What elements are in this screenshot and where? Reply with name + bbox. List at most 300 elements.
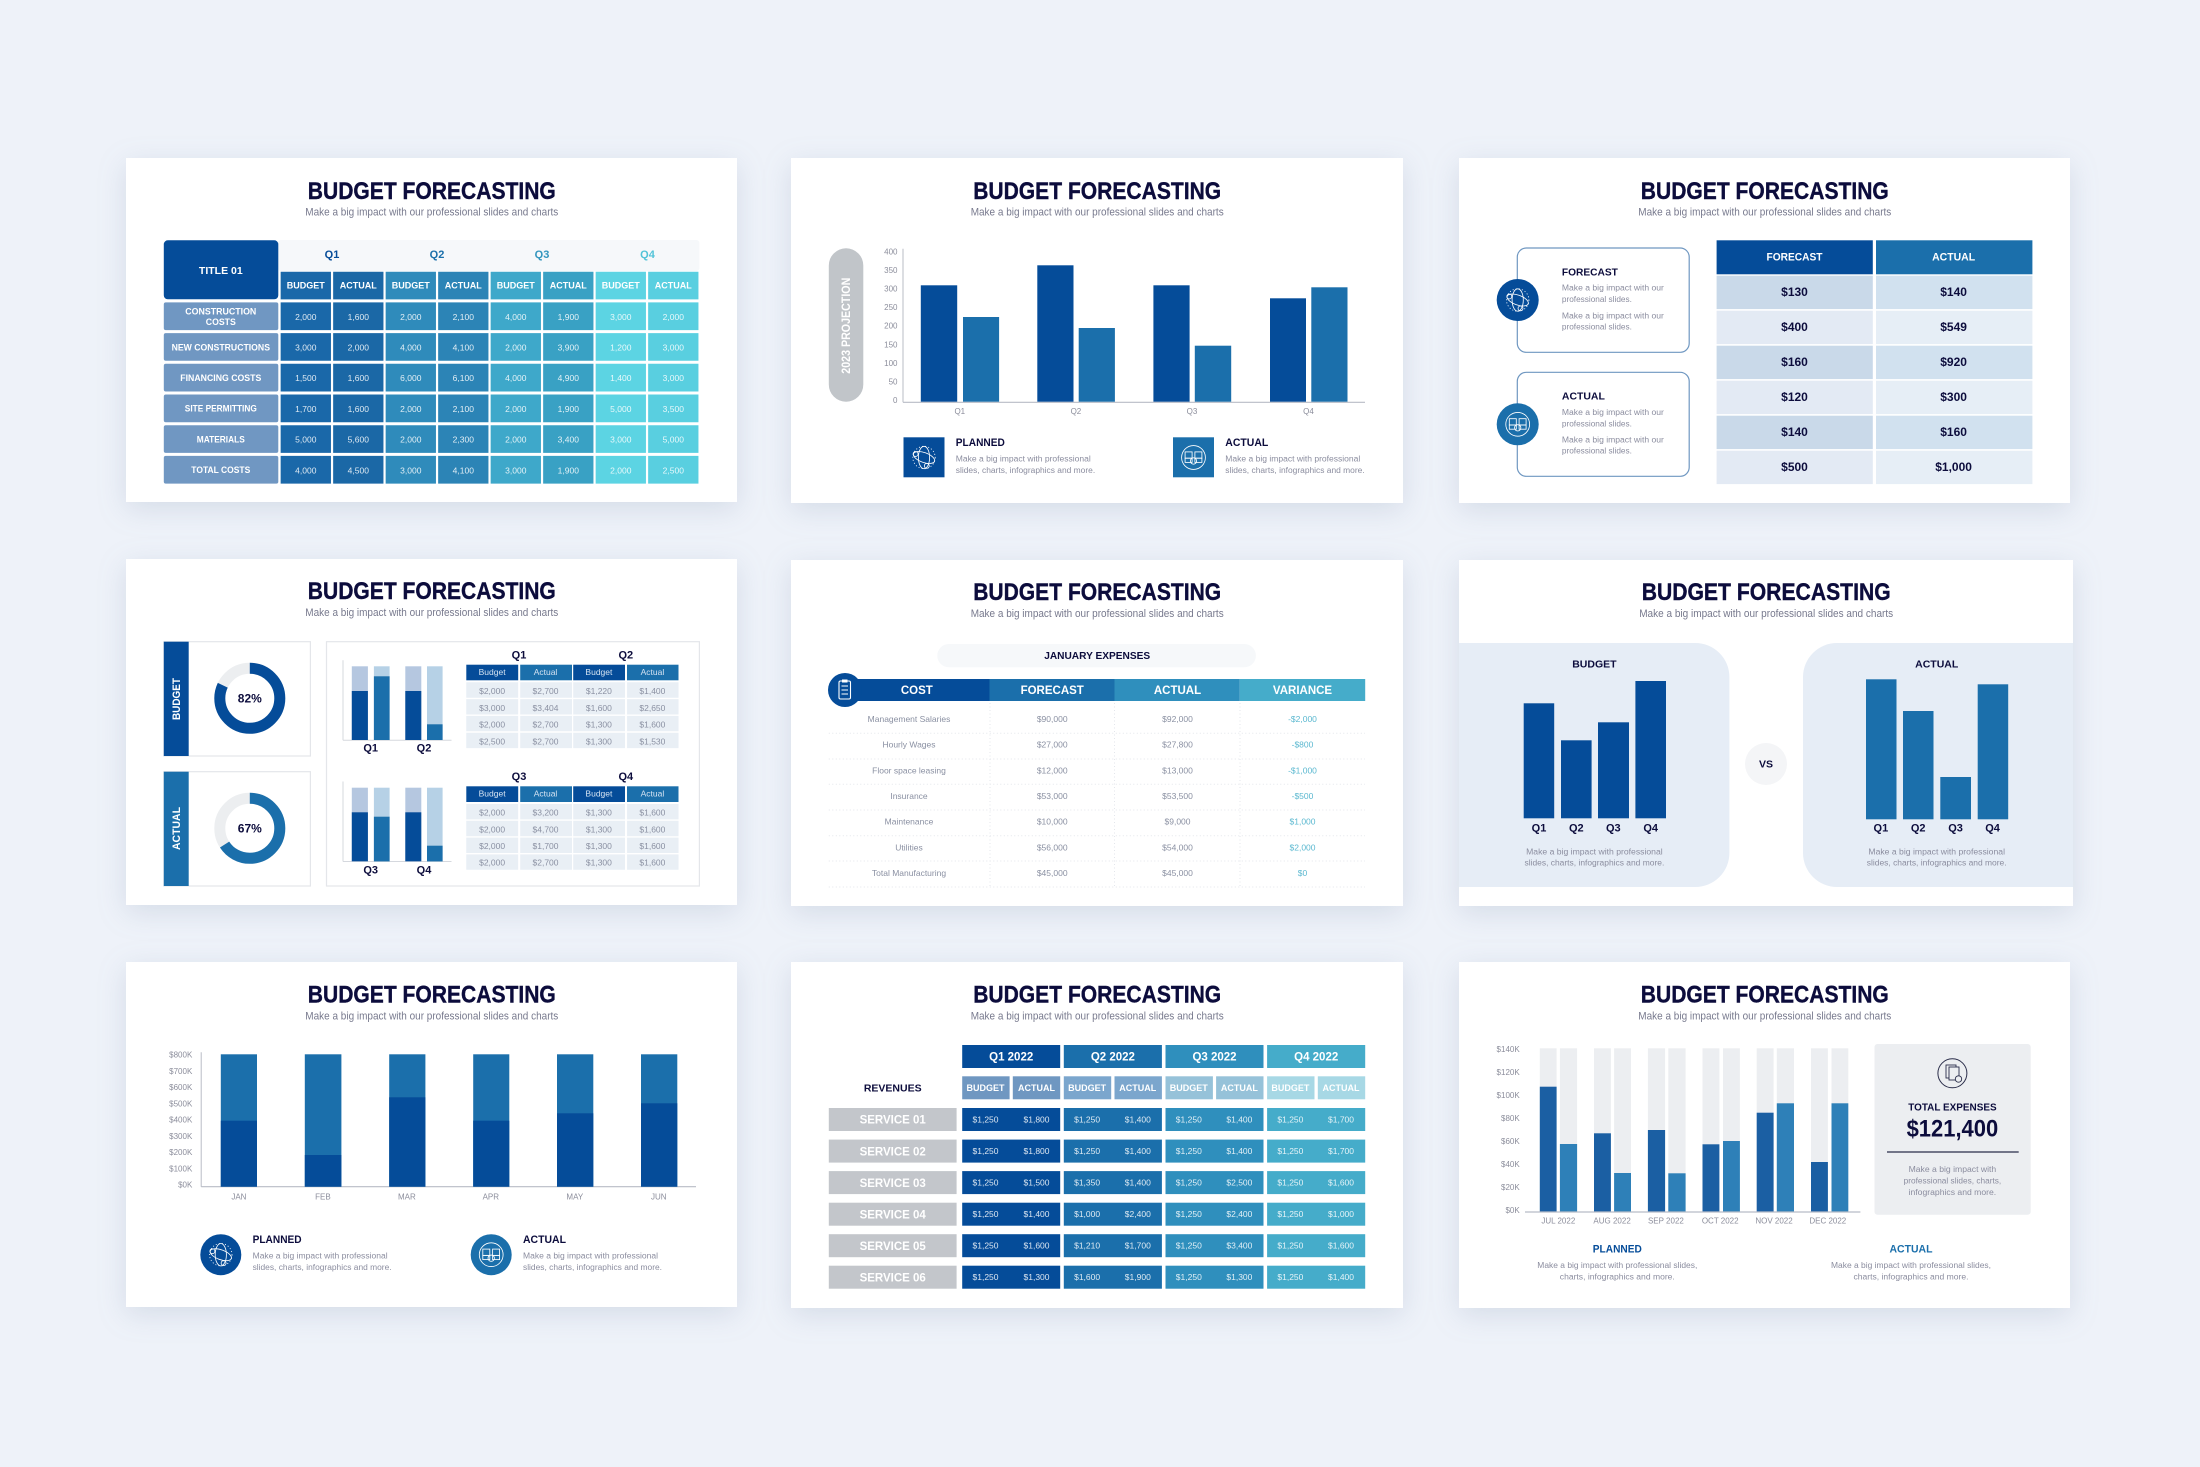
comparison table: $400 — [1781, 320, 1808, 334]
table rows: Total Manufacturing — [872, 868, 946, 878]
stacked bar chart: APR — [483, 1192, 499, 1201]
stacked bars Q3 Q4 — [343, 782, 452, 876]
budget panel: Q3 — [1606, 823, 1621, 835]
budget and actual sub headers: BUDGET — [1068, 1083, 1107, 1093]
budget panel: Q4 — [1643, 823, 1659, 835]
actual panel: ACTUAL — [1915, 659, 1959, 671]
table values: 4,100 — [453, 342, 474, 352]
subtitle: Make a big impact with our professional slides and charts — [1638, 1010, 1892, 1022]
budget panel — [1459, 643, 1729, 887]
table values: $1,800 — [1024, 1146, 1050, 1156]
budget panel: Q1 — [1532, 823, 1546, 835]
column headers: BUDGET — [602, 280, 640, 290]
comparison table: $549 — [1940, 320, 1967, 334]
legend: actual: slides, charts, infographics and more. — [1225, 466, 1365, 475]
table values: 1,600 — [348, 373, 369, 383]
legend: planned: slides, charts, infographics and more. — [956, 466, 1095, 475]
legend: planned: PLANNED — [253, 1234, 302, 1246]
actual panel: Q1 — [1874, 823, 1888, 835]
table rows: Hourly Wages — [882, 740, 936, 750]
quarter headers: Q2 2022 — [1091, 1052, 1135, 1064]
service labels — [829, 1108, 957, 1289]
table values: $1,250 — [1074, 1114, 1100, 1124]
legend: planned: PLANNED — [1593, 1243, 1642, 1255]
legend: actual: Make a big impact with professional — [523, 1252, 658, 1261]
quarter header strip — [278, 240, 699, 271]
paired bar chart — [1497, 1045, 1860, 1225]
table Q3 Q4: $4,700 — [532, 824, 559, 834]
actual panel: slides, charts, infographics and more. — [1867, 859, 2007, 868]
table values: 2,500 — [663, 465, 684, 475]
legend: actual: Make a big impact with professional slides, — [1831, 1261, 1991, 1270]
table values: 6,100 — [453, 373, 474, 383]
stacked bar chart: $100K — [169, 1164, 193, 1174]
table rows: $1,000 — [1290, 817, 1316, 827]
table values: 1,500 — [295, 373, 317, 383]
table corner: title 01: TITLE 01 — [199, 265, 243, 277]
column headers: BUDGET — [392, 280, 430, 290]
title: BUDGET FORECASTING — [308, 578, 556, 605]
table values: 4,500 — [348, 465, 369, 475]
table Q3 Q4: Actual — [641, 789, 664, 799]
table values: $1,250 — [1277, 1114, 1304, 1124]
table rows: Utilities — [895, 842, 923, 852]
table Q3 Q4: $2,000 — [479, 858, 505, 868]
budget panel: slides, charts, infographics and more. — [1524, 859, 1664, 868]
legend: actual — [1831, 1243, 1991, 1281]
comparison table: ACTUAL — [1932, 252, 1975, 264]
january expenses pill: JANUARY EXPENSES — [1044, 650, 1150, 662]
table values: 1,900 — [558, 404, 579, 414]
table Q3 Q4: $1,600 — [639, 858, 666, 868]
stacked bar chart: MAR — [398, 1192, 416, 1201]
panel: slide 6 budget vs actual — [1459, 560, 2073, 906]
bar chart: Q1 — [954, 407, 966, 416]
column headers — [287, 280, 692, 290]
actual card: professional slides. — [1562, 447, 1632, 456]
legend: actual: ACTUAL — [1225, 437, 1269, 449]
table Q1 Q2: $2,000 — [479, 686, 505, 696]
table values: 3,500 — [663, 404, 684, 414]
column headers: BUDGET — [287, 280, 325, 290]
stacked bars Q3 Q4: Q4 — [417, 864, 432, 876]
stacked bar chart: JUN — [651, 1192, 667, 1201]
table values: 3,000 — [295, 342, 317, 352]
paired bar chart: $60K — [1501, 1137, 1520, 1146]
title: BUDGET FORECASTING — [973, 981, 1221, 1008]
comparison table: $120 — [1781, 390, 1808, 404]
legend: planned: PLANNED — [956, 437, 1005, 449]
column headers: ACTUAL — [655, 280, 692, 290]
table Q1 Q2: Actual — [534, 667, 557, 677]
table values — [972, 1114, 1354, 1282]
table Q3 Q4: $1,300 — [586, 841, 612, 851]
table Q3 Q4: $2,000 — [479, 807, 505, 817]
bar chart: 200 — [884, 322, 898, 331]
table values: $1,700 — [1328, 1146, 1354, 1156]
budget and actual sub headers: BUDGET — [1271, 1083, 1310, 1093]
table values: 4,000 — [295, 465, 317, 475]
revenues label: REVENUES — [864, 1083, 922, 1095]
paired bar chart: $120K — [1497, 1068, 1520, 1077]
title: BUDGET FORECASTING — [1641, 981, 1889, 1008]
actual card — [1497, 372, 1689, 476]
table values: $1,250 — [972, 1272, 999, 1282]
budget and actual sub headers: BUDGET — [1170, 1083, 1208, 1093]
panel: slide 4 donuts and quarter tables — [126, 559, 737, 905]
table rows — [868, 714, 1317, 878]
table grid lines — [829, 703, 1365, 887]
legend: actual: slides, charts, infographics and more. — [523, 1263, 662, 1272]
budget and actual sub headers: ACTUAL — [1221, 1083, 1258, 1093]
quarter header strip: Q3 — [535, 249, 549, 261]
comparison table: FORECAST — [1766, 252, 1823, 264]
row labels: MATERIALS — [197, 434, 245, 444]
budget and actual sub headers: BUDGET — [966, 1083, 1005, 1093]
table values: $1,250 — [1074, 1146, 1100, 1156]
bar chart: 400 — [884, 247, 898, 256]
legend: planned — [1537, 1243, 1697, 1281]
table values: $1,000 — [1328, 1209, 1354, 1219]
actual donut panel: ACTUAL — [171, 807, 183, 850]
table values: $1,600 — [1328, 1241, 1354, 1251]
table values: $1,600 — [1024, 1241, 1050, 1251]
table rows: $53,500 — [1162, 791, 1193, 801]
table header — [850, 679, 1365, 701]
title: BUDGET FORECASTING — [308, 981, 556, 1008]
comparison table — [1717, 240, 2032, 484]
budget panel: Q2 — [1569, 823, 1584, 835]
stacked bar chart: $0K — [178, 1181, 193, 1190]
paired bar chart: DEC 2022 — [1809, 1216, 1847, 1225]
vs badge — [1745, 743, 1787, 785]
table values: 3,000 — [663, 342, 684, 352]
table values: $1,250 — [1176, 1146, 1202, 1156]
stacked bar chart: FEB — [315, 1192, 331, 1201]
column headers: ACTUAL — [340, 280, 377, 290]
paired bar chart: SEP 2022 — [1648, 1216, 1684, 1225]
subtitle: Make a big impact with our professional slides and charts — [305, 607, 559, 619]
forecast card: Make a big impact with our — [1562, 311, 1664, 320]
table rows: $92,000 — [1162, 714, 1193, 724]
table rows: $27,800 — [1162, 740, 1193, 750]
actual panel: Make a big impact with professional — [1868, 847, 2005, 856]
table values: $1,210 — [1074, 1241, 1100, 1251]
table values: $1,250 — [972, 1114, 999, 1124]
table rows: -$2,000 — [1288, 714, 1317, 724]
table rows: $56,000 — [1037, 842, 1068, 852]
table Q3 Q4: $1,700 — [532, 841, 559, 851]
service labels: SERVICE 06 — [860, 1272, 926, 1284]
table values: 3,000 — [610, 435, 632, 445]
table values: 3,000 — [505, 465, 527, 475]
table Q3 Q4: $1,300 — [586, 858, 612, 868]
bar chart: Q3 — [1187, 407, 1198, 416]
table Q3 Q4: Budget — [585, 789, 613, 799]
table values: $2,400 — [1226, 1209, 1253, 1219]
subtitle: Make a big impact with our professional slides and charts — [1638, 206, 1892, 218]
table values: $1,800 — [1024, 1114, 1050, 1124]
stacked bar chart: $300K — [169, 1132, 193, 1141]
legend: planned: Make a big impact with professional — [253, 1252, 388, 1261]
table values: 2,000 — [610, 465, 632, 475]
row labels: NEW CONSTRUCTIONS — [172, 342, 270, 352]
table values: 3,000 — [663, 373, 684, 383]
title: BUDGET FORECASTING — [1641, 178, 1889, 205]
quarter header strip: Q4 — [640, 249, 656, 261]
quarter headers — [962, 1045, 1365, 1068]
table rows: $10,000 — [1037, 817, 1068, 827]
table Q3 Q4: $1,300 — [586, 824, 612, 834]
table columns — [306, 272, 673, 484]
comparison table: $160 — [1940, 425, 1967, 439]
bar chart: 0 — [893, 396, 898, 405]
table Q1 Q2: Q2 — [618, 650, 633, 662]
comparison table: $1,000 — [1935, 460, 1972, 474]
table values: 2,000 — [400, 435, 422, 445]
table Q1 Q2: $1,300 — [586, 720, 612, 730]
paired bar chart: AUG 2022 — [1593, 1216, 1631, 1225]
table values: $1,400 — [1024, 1209, 1050, 1219]
vs badge: VS — [1759, 758, 1773, 770]
actual donut panel — [164, 772, 310, 886]
table Q1 Q2: $2,700 — [532, 736, 559, 746]
table values: 3,000 — [610, 312, 632, 322]
budget and actual sub headers — [962, 1076, 1365, 1099]
bar chart — [884, 247, 1365, 416]
subtitle: Make a big impact with our professional slides and charts — [971, 608, 1224, 620]
title: BUDGET FORECASTING — [973, 178, 1221, 205]
stacked bar chart: $700K — [169, 1067, 193, 1076]
icon: clipboard — [828, 673, 862, 707]
table Q1 Q2: $2,650 — [639, 703, 666, 713]
table Q1 Q2: $3,404 — [532, 703, 559, 713]
table values: $1,400 — [1125, 1178, 1151, 1188]
quarter headers: Q4 2022 — [1294, 1052, 1338, 1064]
panel: slide 8 revenues table — [791, 962, 1403, 1308]
row labels: CONSTRUCTION — [185, 306, 256, 316]
stacked bar chart: $600K — [169, 1083, 193, 1092]
actual card: Make a big impact with our — [1562, 435, 1664, 444]
title: BUDGET FORECASTING — [1642, 579, 1891, 606]
legend: actual — [1173, 437, 1365, 477]
table values: $1,000 — [1074, 1209, 1100, 1219]
comparison table: $500 — [1781, 460, 1808, 474]
table Q1 Q2: $1,220 — [586, 686, 612, 696]
forecast card: professional slides. — [1562, 323, 1632, 332]
forecast card: Make a big impact with our — [1562, 284, 1664, 293]
table rows: -$500 — [1292, 791, 1314, 801]
table rows: Insurance — [890, 791, 928, 801]
service labels: SERVICE 01 — [860, 1115, 926, 1127]
table Q3 Q4: Q4 — [618, 771, 634, 783]
legend: planned — [904, 437, 1095, 477]
table values: $1,250 — [1176, 1209, 1202, 1219]
table values: $2,500 — [1226, 1178, 1253, 1188]
total expenses panel: TOTAL EXPENSES — [1908, 1101, 1997, 1113]
table values: 5,000 — [610, 404, 632, 414]
slide card 6 — [1459, 560, 2073, 906]
paired bar chart: $20K — [1501, 1183, 1520, 1192]
table values: 2,000 — [295, 312, 317, 322]
legend: planned: Make a big impact with professional — [956, 455, 1091, 464]
slide card 8 — [791, 962, 1403, 1308]
table values: $3,400 — [1226, 1241, 1253, 1251]
actual panel: Q3 — [1948, 823, 1963, 835]
stacked bar chart — [169, 1051, 696, 1201]
paired bar chart: $100K — [1497, 1091, 1520, 1100]
stacked bar chart: $400K — [169, 1116, 193, 1125]
slide card 5 — [791, 560, 1403, 906]
stacked bars Q3 Q4: Q3 — [363, 864, 378, 876]
value bands — [962, 1108, 1365, 1289]
table Q3 Q4 — [466, 771, 678, 871]
table Q3 Q4: $2,700 — [532, 858, 559, 868]
table values: 2,000 — [663, 312, 684, 322]
table header: ACTUAL — [1154, 685, 1201, 697]
bar chart: 350 — [884, 266, 898, 275]
january expenses pill — [937, 644, 1256, 667]
legend: planned — [200, 1234, 392, 1275]
table values: $1,300 — [1226, 1272, 1253, 1282]
table values: $1,250 — [1176, 1178, 1202, 1188]
comparison table: $160 — [1781, 355, 1808, 369]
table rows: Management Salaries — [868, 714, 950, 724]
subtitle: Make a big impact with our professional slides and charts — [971, 206, 1224, 218]
table Q3 Q4: $1,600 — [639, 807, 666, 817]
stacked bar chart: $200K — [169, 1148, 193, 1157]
slide card 7 — [126, 962, 737, 1307]
table values: 2,000 — [505, 342, 527, 352]
panel: slide 7 monthly stacked bars — [126, 962, 737, 1307]
budget and actual sub headers: ACTUAL — [1119, 1083, 1157, 1093]
table Q1 Q2 — [466, 650, 678, 750]
total expenses panel: professional slides, charts, — [1904, 1177, 2001, 1186]
column headers: ACTUAL — [550, 280, 587, 290]
panel: slide 1 quarterly budget table — [126, 158, 737, 502]
table values: $1,250 — [972, 1178, 999, 1188]
table values: $1,250 — [1277, 1272, 1304, 1282]
table rows: $27,000 — [1037, 740, 1068, 750]
legend: planned: charts, infographics and more. — [1560, 1272, 1675, 1281]
table Q1 Q2: $2,700 — [532, 720, 559, 730]
total expenses panel — [1874, 1044, 2031, 1215]
bar chart: 300 — [884, 284, 898, 294]
table values: 4,000 — [505, 312, 527, 322]
budget and actual sub headers: ACTUAL — [1018, 1083, 1055, 1093]
table Q1 Q2: $2,700 — [532, 686, 559, 696]
stacked bar chart: $500K — [169, 1100, 193, 1108]
bar chart: 100 — [884, 359, 898, 368]
budget panel: BUDGET — [1572, 659, 1617, 671]
projection pill — [829, 248, 863, 402]
table header: COST — [901, 685, 933, 697]
table values: 4,000 — [505, 373, 527, 383]
table values: $1,600 — [1074, 1272, 1100, 1282]
column headers: ACTUAL — [445, 280, 482, 290]
table values: 2,100 — [453, 404, 474, 414]
legend: actual: charts, infographics and more. — [1854, 1272, 1968, 1281]
row labels — [164, 302, 278, 484]
table Q3 Q4: $1,600 — [639, 841, 666, 851]
table Q1 Q2: Actual — [641, 667, 664, 677]
bar chart: Q4 — [1303, 407, 1314, 416]
table rows: $9,000 — [1164, 817, 1191, 827]
actual donut panel: 67% — [238, 822, 262, 836]
table values: 3,900 — [558, 342, 579, 352]
table rows: $0 — [1298, 868, 1307, 878]
service labels: SERVICE 05 — [860, 1241, 926, 1253]
table values: $1,250 — [1277, 1241, 1304, 1251]
table Q1 Q2: $1,530 — [639, 736, 666, 746]
row labels: TOTAL COSTS — [191, 465, 250, 475]
table values: $1,250 — [972, 1146, 999, 1156]
legend: actual — [471, 1234, 662, 1275]
table Q3 Q4: Actual — [534, 789, 557, 799]
table Q3 Q4: Q3 — [512, 771, 526, 783]
table values: $1,250 — [1176, 1114, 1202, 1124]
service labels: SERVICE 02 — [860, 1146, 926, 1158]
legend: planned: Make a big impact with professional slides, — [1537, 1261, 1697, 1270]
table values: 4,000 — [400, 342, 422, 352]
title: BUDGET FORECASTING — [973, 579, 1221, 606]
table values: $1,400 — [1125, 1146, 1151, 1156]
stacked bar chart: JAN — [231, 1192, 247, 1201]
total expenses panel: $121,400 — [1907, 1116, 1998, 1143]
table Q3 Q4: $1,300 — [586, 807, 612, 817]
table values: 6,000 — [400, 373, 422, 383]
row labels: FINANCING COSTS — [180, 373, 261, 383]
table Q3 Q4: $1,600 — [639, 824, 666, 834]
table Q1 Q2: $1,300 — [586, 736, 612, 746]
table values: $1,500 — [1024, 1178, 1050, 1188]
forecast card: FORECAST — [1562, 266, 1618, 278]
table Q3 Q4: $2,000 — [479, 824, 505, 834]
paired bar chart: $0K — [1505, 1206, 1520, 1215]
table corner: title 01 — [164, 240, 278, 299]
total expenses panel: Make a big impact with — [1909, 1165, 1996, 1174]
table values: 3,000 — [400, 465, 422, 475]
quarter headers: Q3 2022 — [1192, 1052, 1237, 1064]
table rows: Floor space leasing — [872, 765, 946, 775]
table values: $1,700 — [1328, 1114, 1354, 1124]
table Q3 Q4: $3,200 — [532, 807, 559, 817]
column headers: BUDGET — [497, 280, 535, 290]
table values: 5,600 — [348, 435, 369, 445]
table values: $1,250 — [1176, 1272, 1202, 1282]
table Q1 Q2: Q1 — [512, 650, 526, 662]
paired bar chart: JUL 2022 — [1541, 1216, 1576, 1225]
legend: actual: ACTUAL — [1890, 1243, 1933, 1255]
table values: 2,000 — [400, 312, 422, 322]
paired bar chart: OCT 2022 — [1702, 1216, 1739, 1225]
table values: $1,250 — [1277, 1146, 1304, 1156]
table Q1 Q2: Budget — [585, 667, 613, 677]
quarter header strip: Q2 — [430, 249, 444, 261]
comparison table: $140 — [1781, 425, 1808, 439]
table values: $2,400 — [1125, 1209, 1151, 1219]
table values: $1,250 — [972, 1209, 999, 1219]
table values: 1,200 — [610, 342, 632, 352]
actual panel — [1803, 643, 2073, 887]
actual panel: Q2 — [1911, 823, 1926, 835]
table Q1 Q2: Budget — [479, 667, 506, 677]
table values: $1,250 — [972, 1241, 999, 1251]
forecast card: professional slides. — [1562, 295, 1632, 304]
table rows: $45,000 — [1037, 868, 1068, 878]
table values: 2,300 — [453, 435, 474, 445]
subtitle: Make a big impact with our professional slides and charts — [971, 1010, 1224, 1022]
